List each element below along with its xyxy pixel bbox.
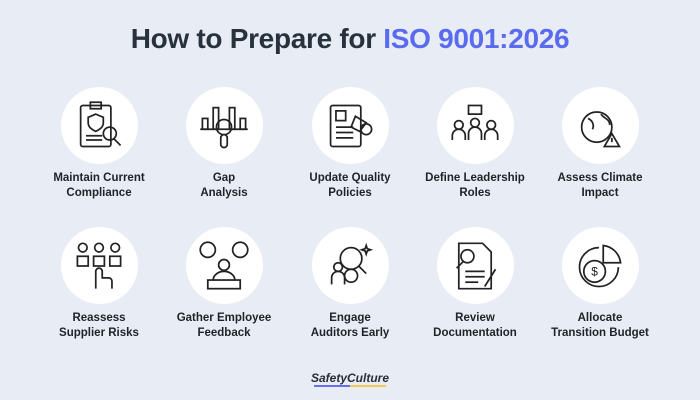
item: update policies	[309, 87, 391, 199]
item: engage auditors: Auditors Early	[311, 327, 389, 339]
item: climate impact: Assess Climate	[557, 172, 643, 184]
item: employee feedback	[177, 227, 271, 339]
item: employee feedback: Gather Employee	[177, 312, 271, 324]
item: review documentation: Review	[455, 312, 495, 324]
item: review documentation	[433, 227, 517, 339]
item: maintain compliance: Compliance	[66, 187, 132, 199]
item: transition budget: Transition Budget	[551, 327, 649, 339]
item: supplier risks: Supplier Risks	[59, 327, 139, 339]
item: employee feedback: Feedback	[197, 327, 251, 339]
item: climate impact: Impact	[581, 187, 619, 199]
title: How to Prepare for ISO 9001:2026	[131, 23, 569, 54]
item: transition budget	[551, 227, 649, 339]
item: supplier risks: Reassess	[72, 312, 126, 324]
logo: SafetyCulture	[311, 371, 389, 385]
item: leadership roles: Roles	[459, 187, 491, 199]
item: engage auditors: Engage	[329, 312, 371, 324]
item: engage auditors	[311, 227, 390, 339]
item: update policies: Policies	[328, 187, 372, 199]
item: review documentation: Documentation	[433, 327, 517, 339]
item: climate impact	[557, 87, 643, 199]
item: gap analysis	[186, 87, 263, 199]
item: transition budget: $	[591, 264, 598, 278]
item: supplier risks	[59, 227, 139, 339]
item: gap analysis: Gap	[213, 172, 235, 184]
item: leadership roles: Define Leadership	[425, 172, 525, 184]
item: gap analysis: Analysis	[200, 187, 248, 199]
item: leadership roles	[425, 87, 525, 199]
item: maintain compliance: Maintain Current	[53, 172, 145, 184]
item: maintain compliance	[53, 87, 145, 199]
item: update policies: Update Quality	[309, 172, 391, 184]
item: transition budget: Allocate	[578, 312, 622, 324]
